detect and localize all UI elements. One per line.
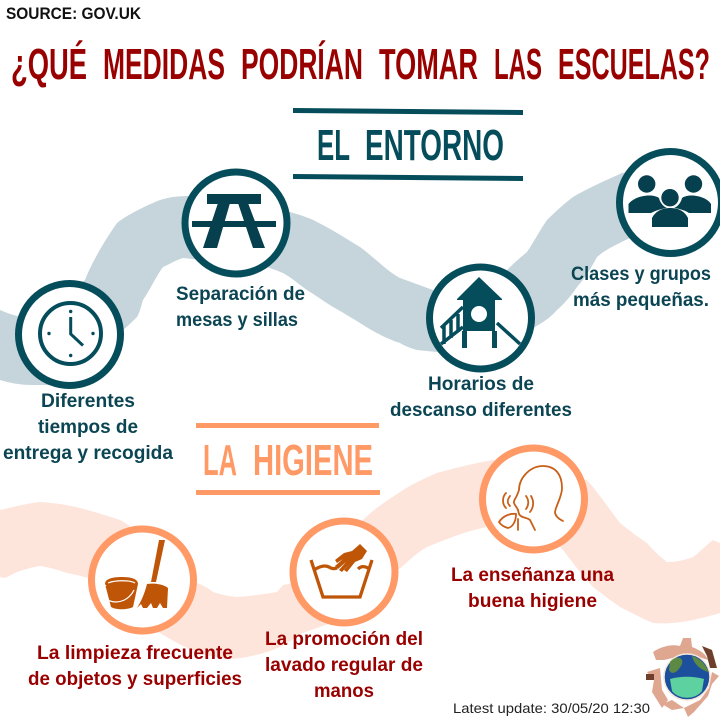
heading: el entorno	[293, 108, 523, 181]
source label: SOURCE: GOV.UK	[6, 4, 142, 23]
icon: bucket and broom	[92, 529, 194, 631]
label: small groups item: más pequeñas.	[573, 290, 709, 311]
label: handwashing item: manos	[314, 681, 374, 702]
icon: playground	[430, 267, 532, 369]
icon: person sneezing	[482, 448, 584, 550]
panel: hygiene teaching item	[451, 448, 614, 612]
label: handwashing item: La promoción del	[265, 629, 423, 650]
ribbon: hygiene path	[0, 460, 720, 659]
label: cleaning item: La limpieza frecuente	[37, 643, 233, 664]
title: LAS	[494, 40, 542, 89]
panel: clock item	[3, 284, 173, 464]
label: clock item: entrega y recogida	[3, 443, 173, 464]
panel: handwashing item	[265, 521, 423, 702]
label: table item: mesas y sillas	[176, 310, 298, 331]
icon: clock	[18, 284, 120, 386]
heading: la higiene: HIGIENE	[253, 436, 373, 485]
title: TOMAR	[379, 40, 478, 89]
icon: globe with mask and hands	[646, 638, 719, 717]
label: playground item: Horarios de	[428, 374, 534, 395]
icon: picnic table	[185, 172, 287, 274]
panel: playground item	[390, 267, 572, 421]
label: clock item: tiempos de	[38, 417, 138, 438]
label: playground item: descanso diferentes	[390, 400, 572, 421]
heading: la higiene: LA	[203, 436, 237, 485]
panel: table item	[176, 172, 305, 331]
label: table item: Separación de	[176, 284, 305, 305]
heading: el entorno: EL	[317, 121, 350, 170]
icon: people group	[620, 152, 720, 254]
update timestamp: Latest update: 30/05/20 12:30	[453, 700, 650, 716]
label: hygiene teaching item: buena higiene	[468, 591, 597, 612]
title: ¿QUÉ	[11, 39, 87, 89]
heading: la higiene	[196, 423, 380, 495]
title: PODRÍAN	[241, 39, 363, 89]
title: MEDIDAS	[103, 40, 225, 89]
panel: cleaning item	[28, 529, 242, 690]
heading: el entorno: ENTORNO	[365, 121, 504, 170]
panel: small groups item	[571, 152, 720, 311]
icon: hand in basin	[293, 521, 395, 623]
label: clock item: Diferentes	[41, 391, 135, 412]
label: cleaning item: de objetos y superficies	[28, 669, 242, 690]
label: small groups item: Clases y grupos	[571, 264, 711, 285]
title	[11, 39, 710, 89]
label: hygiene teaching item: La enseñanza una	[451, 565, 614, 586]
ribbon: environment path	[0, 170, 660, 385]
label: handwashing item: lavado regular de	[265, 655, 423, 676]
